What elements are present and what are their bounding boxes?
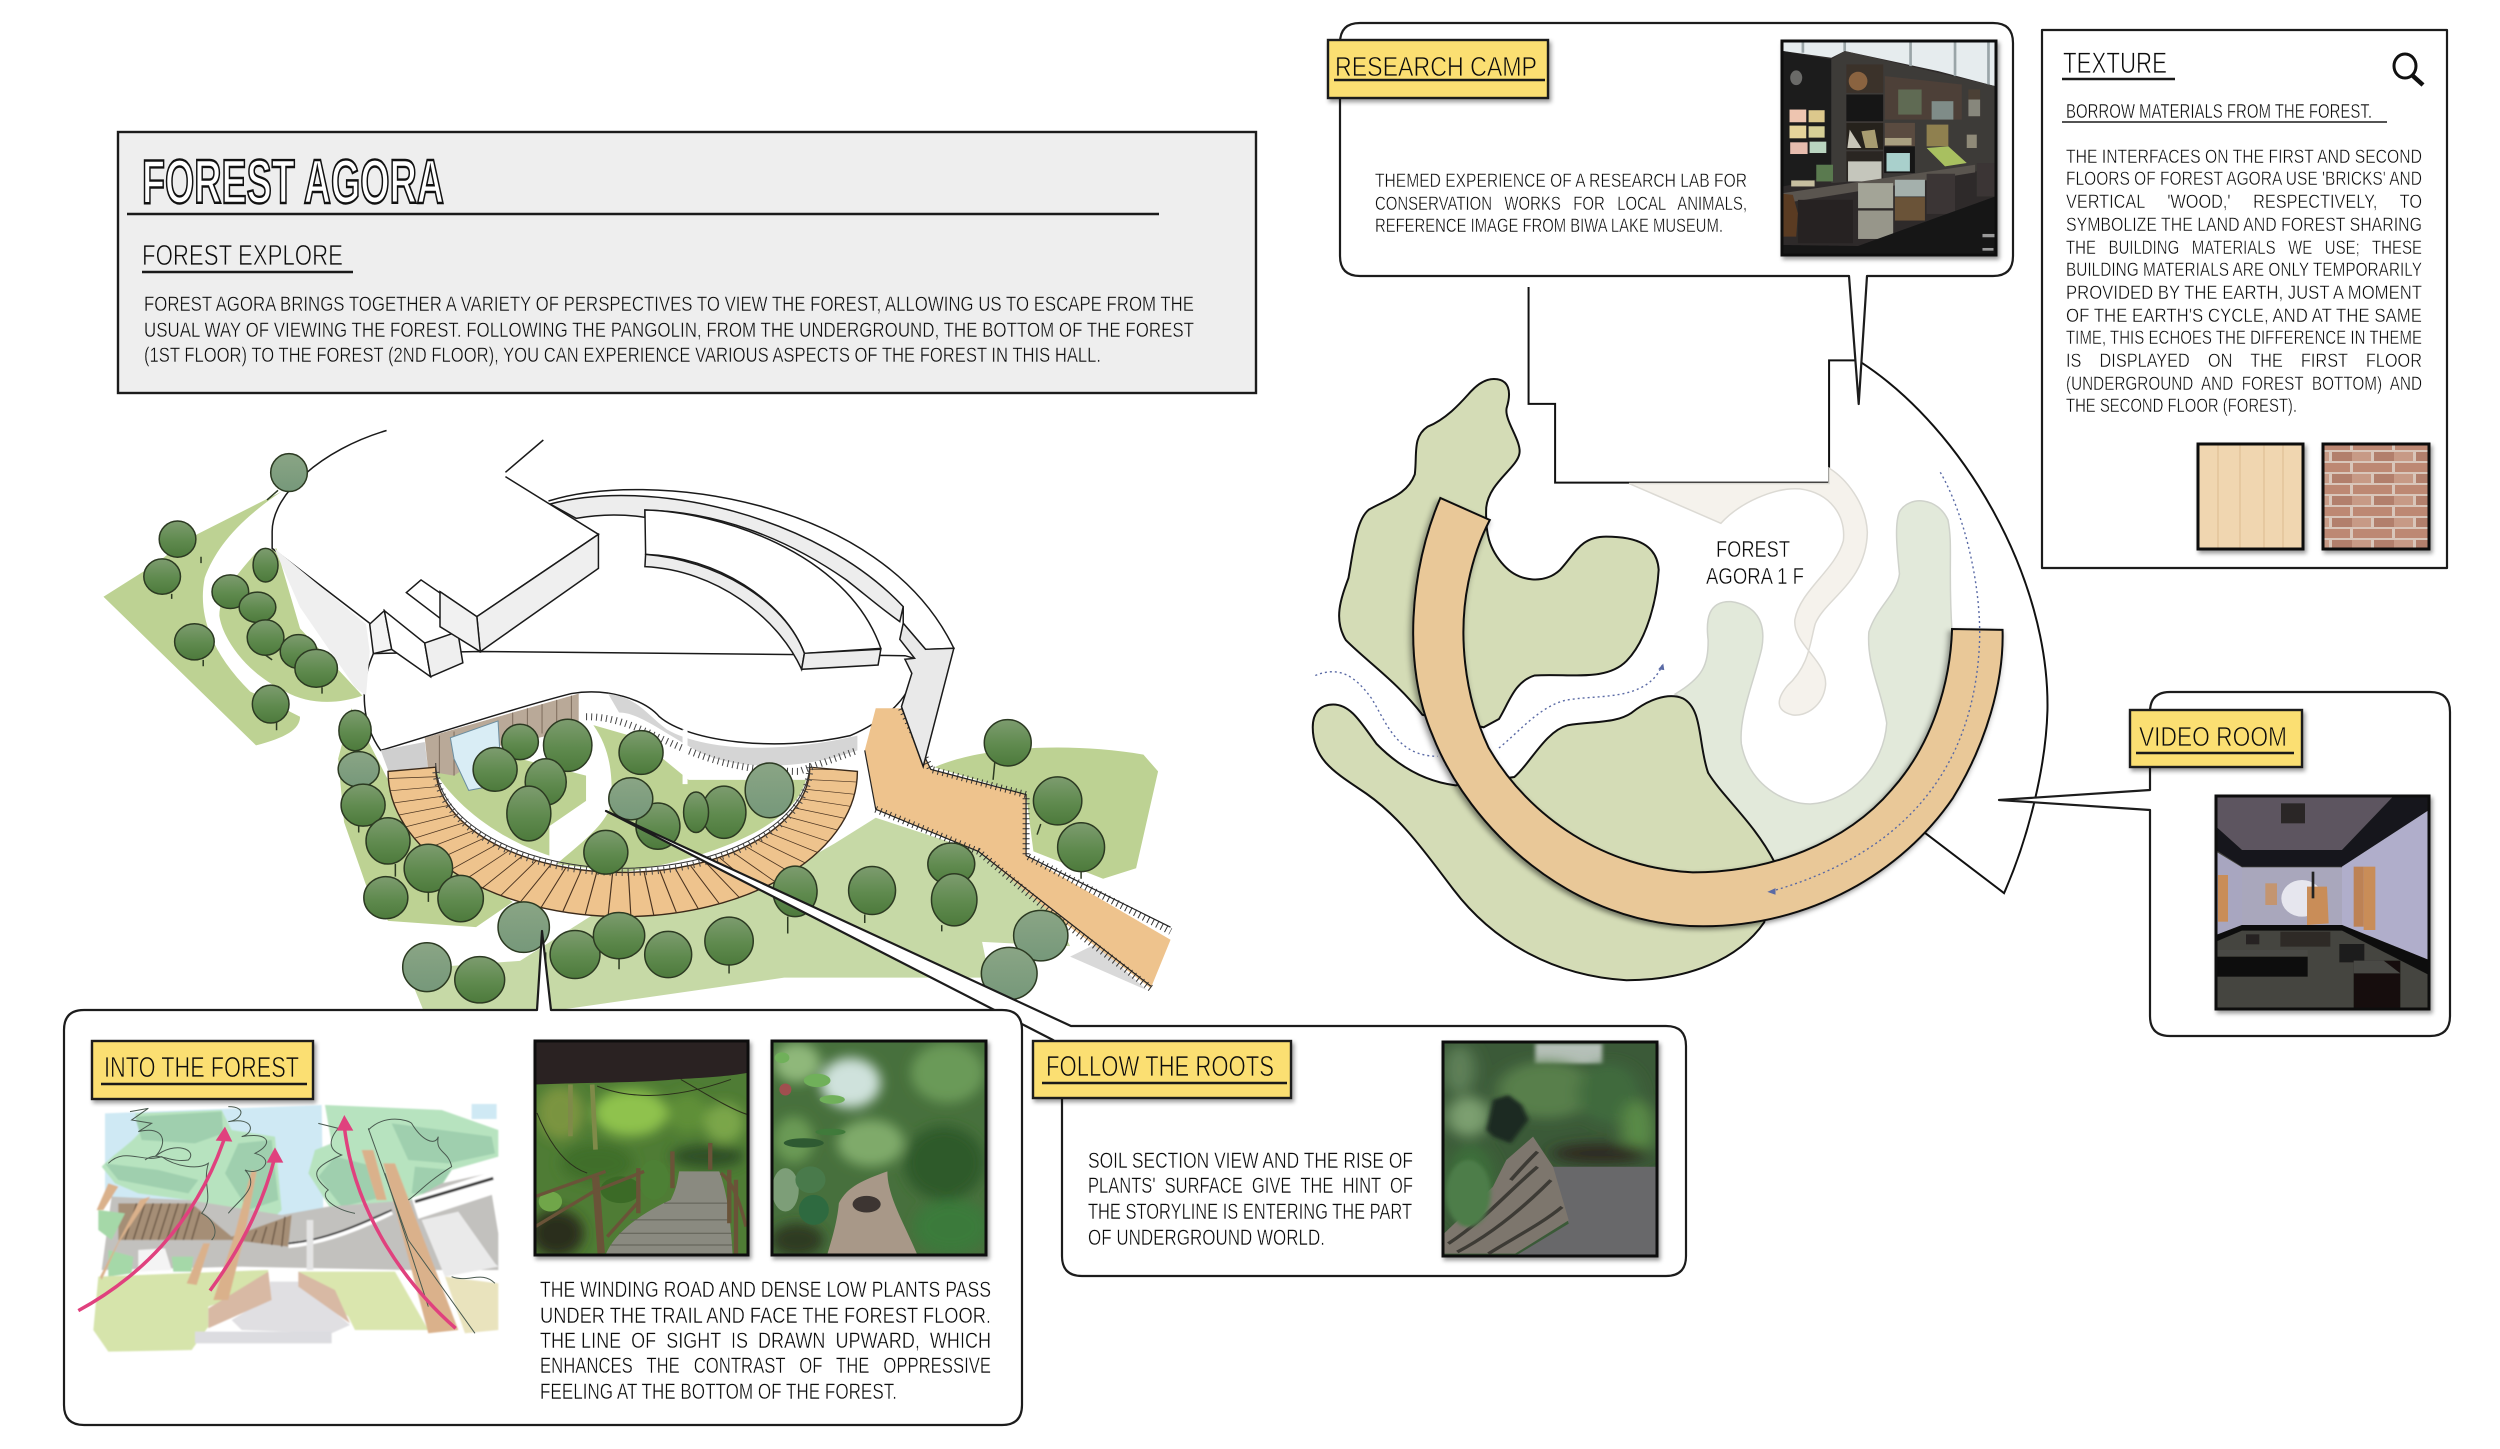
text: Research Camp description: THEMED EXPERIENCE OF A RESEARCH LAB FOR	[1375, 170, 1747, 192]
central box volumes	[384, 580, 476, 677]
trees	[144, 454, 1105, 1003]
text: Into the Forest description	[540, 1277, 991, 1404]
text: Follow the Roots description: SOIL SECTION VIEW AND THE RISE OF	[1088, 1148, 1413, 1173]
text: Texture description	[2066, 147, 2422, 417]
text: Texture description: BUILDING MATERIALS ARE ONLY TEMPORARILY	[2066, 260, 2422, 281]
outer arc ring	[548, 490, 954, 767]
swatch: wood	[2198, 444, 2303, 549]
text: Texture description: (UNDERGROUND AND FOREST BOTTOM) AND	[2066, 374, 2422, 395]
watercolor perspective sketch	[78, 1104, 498, 1352]
label: Follow the Roots	[1033, 1041, 1291, 1098]
panel: Video Room	[1999, 692, 2450, 1036]
curved walkway	[1413, 498, 2003, 926]
intro paragraph: (1ST FLOOR) TO THE FOREST (2ND FLOOR), YOU CAN EXPERIENCE VARIOUS ASPECTS OF THE FOREST IN THIS HALL.	[144, 344, 1101, 367]
intro paragraph	[144, 293, 1194, 367]
upper building volumes and arc walls	[440, 440, 954, 767]
undercroft walls	[608, 694, 857, 766]
plan label: FOREST	[1716, 536, 1790, 562]
inner arc	[645, 510, 881, 669]
title panel	[118, 132, 1256, 393]
text: Into the Forest description: UNDER THE TRAIL AND FACE THE FOREST FLOOR.	[540, 1303, 991, 1328]
text: Research Camp description: REFERENCE IMAGE FROM BIWA LAKE MUSEUM.	[1375, 215, 1723, 237]
text: Texture description: THE INTERFACES ON THE FIRST AND SECOND	[2066, 147, 2422, 168]
text: Texture description: VERTICAL 'WOOD,' RESPECTIVELY, TO	[2066, 192, 2422, 213]
panel: Follow the Roots	[606, 811, 1686, 1276]
photo: forest path	[770, 1041, 988, 1257]
floor plan: Forest Agora 1F	[1313, 287, 2047, 980]
upper railing	[586, 717, 857, 771]
photo: research lab shelves	[1782, 41, 1996, 255]
landscape planting	[103, 492, 1158, 1013]
roof mass	[364, 651, 914, 750]
photo: video room	[2216, 796, 2429, 1009]
intro paragraph: FOREST AGORA BRINGS TOGETHER A VARIETY OF PERSPECTIVES TO VIEW THE FOREST, ALLOWING US TO ESCAPE FROM THE	[144, 293, 1194, 316]
dotted route arrows	[1315, 472, 1980, 892]
label: Research Camp: RESEARCH CAMP	[1335, 51, 1537, 82]
pale beige planting	[1629, 468, 1867, 715]
text: Texture description: OF THE EARTH'S CYCLE, AND AT THE SAME	[2066, 306, 2422, 327]
plan label: AGORA 1 F	[1706, 563, 1804, 589]
upper roof outline	[272, 431, 387, 623]
panel: Texture	[2042, 30, 2447, 568]
photo: boardwalk under rock	[530, 1041, 748, 1257]
subheading: borrow materials: BORROW MATERIALS FROM THE FOREST.	[2066, 101, 2372, 123]
axonometric building sketch	[103, 431, 1171, 1013]
text: Texture description: IS DISPLAYED ON THE FIRST FLOOR	[2066, 351, 2422, 372]
green planting lower	[1313, 696, 1774, 980]
text: Into the Forest description: THE LINE OF SIGHT IS DRAWN UPWARD, WHICH	[540, 1328, 991, 1353]
panel: Research Camp	[1328, 23, 2013, 404]
text: Into the Forest description: THE WINDING ROAD AND DENSE LOW PLANTS PASS	[540, 1277, 991, 1302]
heading: Texture: TEXTURE	[2063, 47, 2167, 80]
ramp	[865, 708, 1171, 990]
intro paragraph: USUAL WAY OF VIEWING THE FOREST. FOLLOWING THE PANGOLIN, FROM THE UNDERGROUND, THE BOTTOM OF THE FOREST	[144, 319, 1194, 342]
text: Research Camp description: CONSERVATION WORKS FOR LOCAL ANIMALS,	[1375, 193, 1747, 215]
left wall	[274, 548, 370, 696]
text: Follow the Roots description: PLANTS' SURFACE GIVE THE HINT OF	[1088, 1173, 1413, 1198]
text: Follow the Roots description: THE STORYLINE IS ENTERING THE PART	[1088, 1199, 1412, 1224]
swatch: brick	[2323, 444, 2429, 549]
sightline arrows	[78, 1127, 456, 1328]
text: Into the Forest description: FEELING AT THE BOTTOM OF THE FOREST.	[540, 1379, 897, 1404]
label: Follow the Roots: FOLLOW THE ROOTS	[1046, 1051, 1274, 1083]
text: Texture description: THE SECOND FLOOR (FOREST).	[2066, 396, 2297, 417]
label: Video Room	[2130, 710, 2302, 767]
building outline	[1529, 287, 2047, 893]
photo: soil section path	[1443, 1042, 1657, 1256]
label: Into the Forest	[92, 1041, 313, 1099]
icon: magnifier	[2394, 54, 2423, 85]
text: Follow the Roots description: OF UNDERGROUND WORLD.	[1088, 1225, 1325, 1250]
text: Texture description: PROVIDED BY THE EARTH, JUST A MOMENT	[2066, 283, 2422, 304]
panel: Into the Forest	[64, 931, 1022, 1425]
text: Into the Forest description: ENHANCES THE CONTRAST OF THE OPPRESSIVE	[540, 1353, 991, 1378]
pale green planting	[1675, 501, 1963, 889]
plan label	[1706, 536, 1804, 589]
circular boardwalk	[388, 763, 857, 917]
subheading: Forest Explore: FOREST EXPLORE	[142, 240, 343, 272]
text: Research Camp description	[1375, 170, 1747, 237]
text: Texture description: SYMBOLIZE THE LAND AND FOREST SHARING	[2066, 215, 2422, 236]
green planting upper	[1339, 379, 1659, 727]
text: Texture description: FLOORS OF FOREST AGORA USE 'BRICKS' AND	[2066, 169, 2422, 190]
text: Follow the Roots description	[1088, 1148, 1413, 1250]
label: Video Room: VIDEO ROOM	[2139, 721, 2287, 752]
label: Into the Forest: INTO THE FOREST	[104, 1052, 299, 1084]
heading: Forest Agora: FOREST AGORA	[142, 148, 444, 217]
label: Research Camp	[1328, 40, 1548, 98]
rectangular block	[440, 440, 598, 652]
sketch line scribbles	[108, 1107, 495, 1333]
